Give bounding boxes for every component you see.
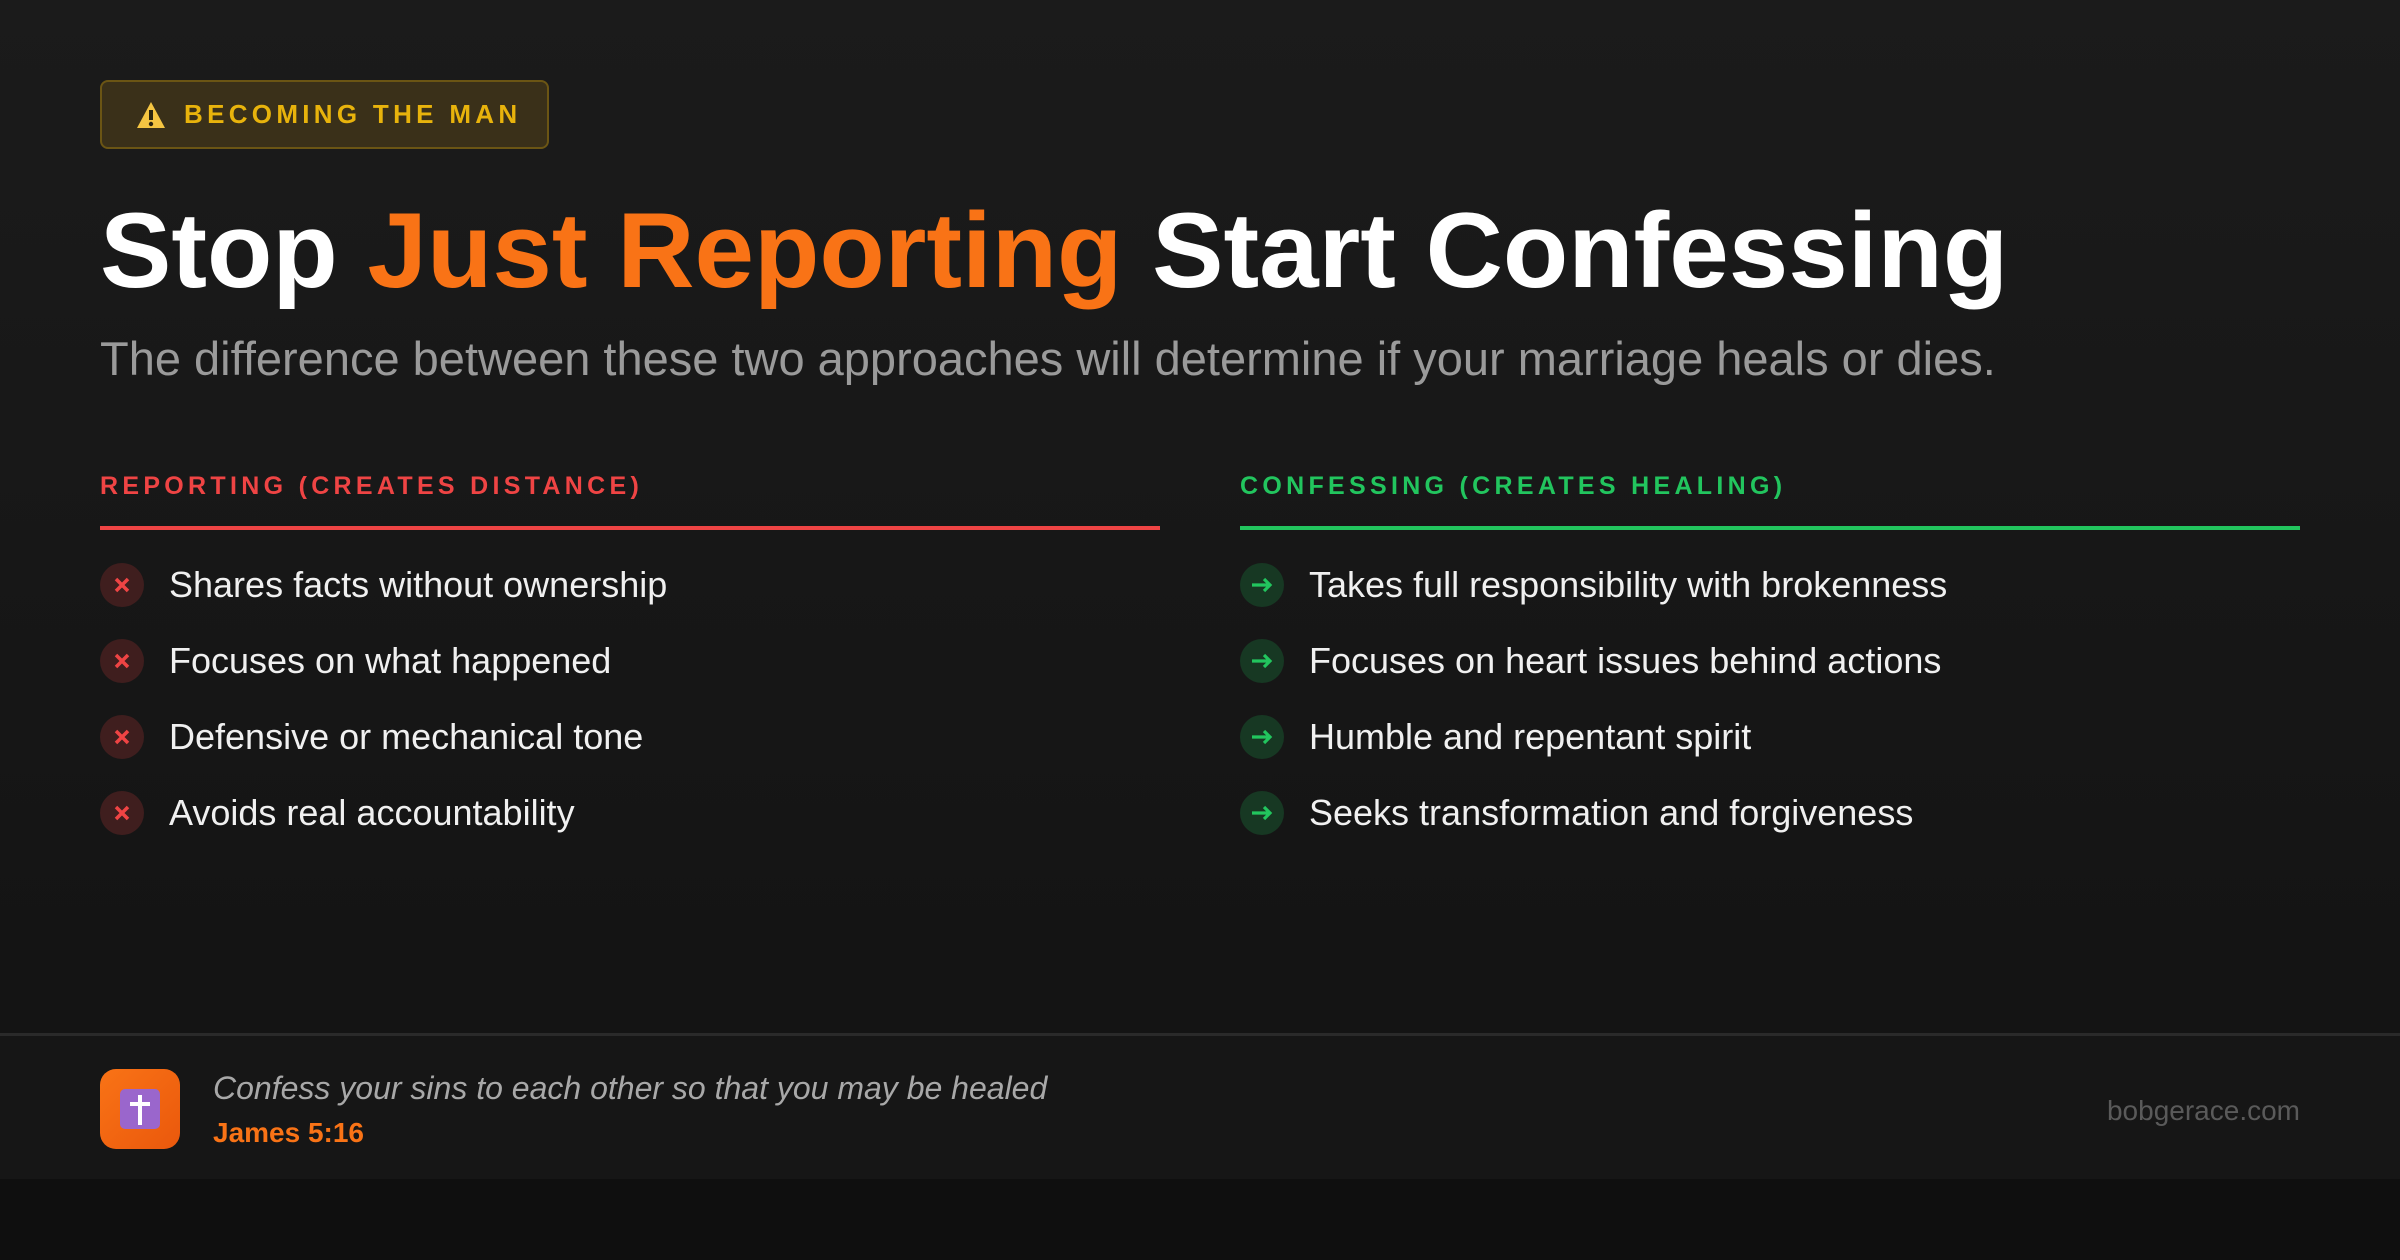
title: Stop Just Reporting Start Confessing [100, 190, 2008, 310]
website: bobgerace.com [2107, 1095, 2300, 1126]
list: confessing items [1240, 563, 1947, 835]
heading: reporting: REPORTING (CREATES DISTANCE) [100, 472, 643, 500]
list: confessing items: Focuses on heart issues behind actions [1309, 640, 1941, 681]
heading: confessing: CONFESSING (CREATES HEALING) [1240, 472, 1786, 500]
footer [0, 1033, 2400, 1179]
list: reporting items: Defensive or mechanical tone [169, 716, 643, 757]
panel: confessing [1240, 472, 2300, 835]
list: confessing items: Seeks transformation and forgiveness [1309, 792, 1913, 833]
badge: BECOMING THE MAN [184, 99, 521, 129]
subtitle: The difference between these two approaches will determine if your marriage heals or dies. [100, 332, 1996, 385]
list: confessing items: Takes full responsibility with brokenness [1309, 564, 1947, 605]
list: reporting items [100, 563, 667, 835]
reference: James 5:16 [213, 1117, 364, 1148]
list: reporting items: Focuses on what happened [169, 640, 611, 681]
icon: cross [100, 1069, 180, 1149]
list: reporting items: Avoids real accountability [169, 792, 575, 833]
quote: Confess your sins to each other so that you may be healed [213, 1070, 1047, 1106]
list: confessing items: Humble and repentant spirit [1309, 716, 1751, 757]
panel: reporting [100, 472, 1160, 835]
badge [100, 80, 549, 149]
list: reporting items: Shares facts without ownership [169, 564, 667, 605]
